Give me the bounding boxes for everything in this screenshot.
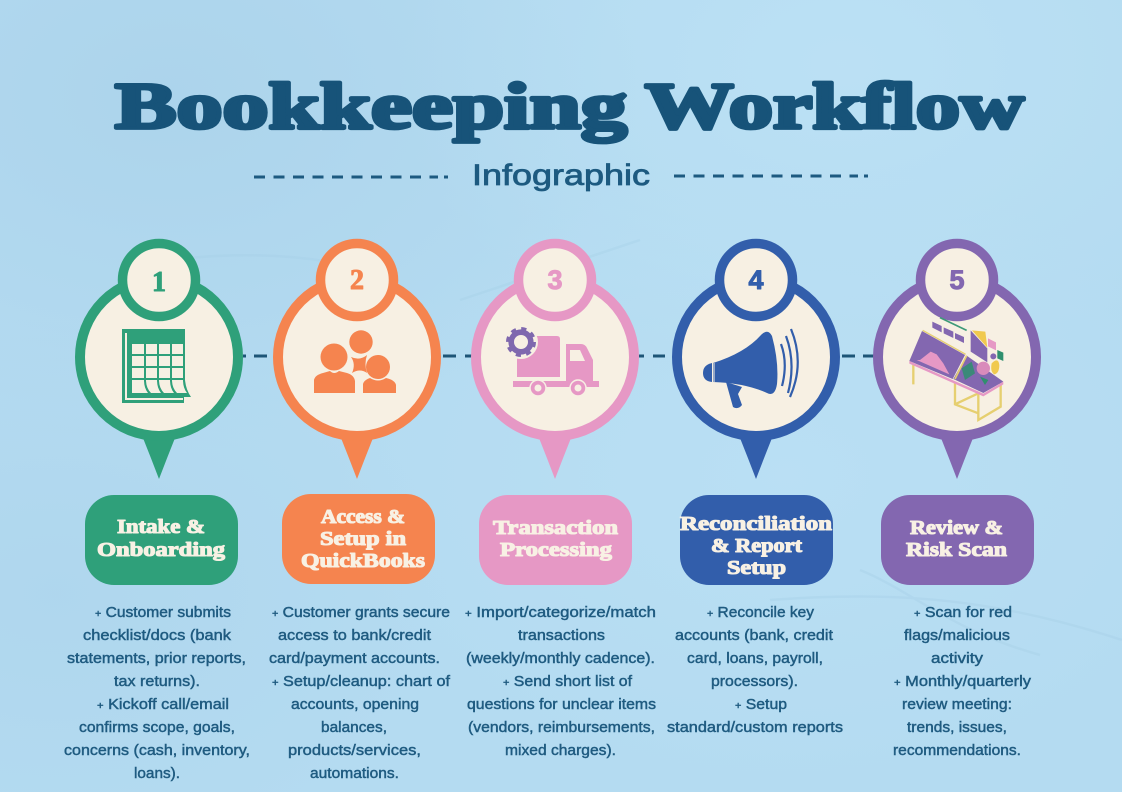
text block: step 5 details — [893, 605, 1032, 759]
pin 2: orange — [278, 244, 436, 479]
text block: step 5 details: + Monthly/quarterly — [894, 674, 1032, 690]
text block: step 5 details: recommendations. — [893, 743, 1021, 759]
panel: step 2 label: Setup in — [320, 528, 406, 550]
text block: step 1 details: + Kickoff call/email — [97, 697, 229, 713]
text block: step 1 details: confirms scope, goals, — [79, 720, 235, 736]
text block: step 3 details: transactions — [518, 628, 605, 644]
icon: isometric desk — [909, 318, 1003, 420]
text block: step 5 details: review meeting: — [902, 697, 1012, 713]
text block: step 4 details: + Reconcile key — [707, 605, 815, 621]
text block: step 1 details: statements, prior reports, — [67, 651, 246, 667]
pin 4: blue — [677, 244, 835, 479]
icon: delivery truck with gear — [504, 325, 599, 396]
text block: step 2 details: access to bank/credit — [278, 628, 431, 644]
text block: step 2 details: products/services, — [288, 743, 421, 759]
text block: step 4 details: processors). — [711, 674, 798, 690]
text block: step 5 details: activity — [931, 651, 984, 667]
text block: step 2 details: accounts, opening — [291, 697, 419, 713]
panel: step 2 label: QuickBooks — [301, 550, 425, 572]
text block: step 3 details: (vendors, reimbursements, — [468, 720, 655, 736]
panel: step 4 label: Reconciliation — [680, 513, 832, 535]
pin 1: green — [80, 244, 238, 479]
panel: step 4 label — [680, 495, 833, 585]
title: Workflow — [645, 70, 1024, 143]
icon: calendar — [122, 329, 191, 403]
title — [115, 70, 1024, 143]
panel: step 2 label: Access & — [321, 506, 405, 528]
panel: step 1 label: Onboarding — [97, 539, 225, 561]
text block: step 1 details: + Customer submits — [95, 605, 231, 621]
text block: step 1 details: checklist/docs (bank — [83, 628, 232, 644]
text block: step 4 details: accounts (bank, credit — [675, 628, 833, 644]
text block: step 2 details: card/payment accounts. — [269, 651, 440, 667]
panel: step 5 label — [881, 495, 1034, 585]
text block: step 5 details: trends, issues, — [907, 720, 1007, 736]
panel: step 1 label: Intake & — [117, 516, 205, 538]
pin 5: purple — [878, 244, 1036, 479]
icon: group of people — [314, 330, 396, 393]
text block: step 1 details — [64, 605, 250, 782]
text block: step 5 details: flags/malicious — [904, 628, 1010, 644]
dashed connector between pins — [243, 354, 875, 358]
text block: step 3 details: + Import/categorize/match — [465, 605, 656, 621]
panel: step 2 label — [282, 494, 435, 584]
panel: step 3 label — [479, 495, 632, 585]
number 5: 5 — [949, 265, 965, 295]
text block: step 4 details: standard/custom reports — [667, 720, 843, 736]
text block: step 1 details: concerns (cash, inventory, — [64, 743, 250, 759]
panel: step 1 label — [85, 495, 238, 585]
text block: step 2 details: automations. — [310, 766, 399, 782]
panel: step 4 label: Setup — [727, 557, 786, 579]
icon: megaphone — [703, 329, 798, 408]
number 3: 3 — [547, 265, 563, 295]
text block: step 3 details: mixed charges). — [505, 743, 616, 759]
panel: step 3 label: Processing — [500, 539, 612, 561]
text block: step 5 details: + Scan for red — [914, 605, 1012, 621]
text block: step 2 details: + Customer grants secure — [272, 605, 450, 621]
subtitle with dashed rules: Infographic — [472, 159, 650, 192]
text block: step 4 details — [667, 605, 843, 736]
text block: step 3 details: questions for unclear items — [467, 697, 656, 713]
panel: step 3 label: Transaction — [493, 517, 618, 539]
text block: step 3 details: + Send short list of — [503, 674, 633, 690]
pin 3: pink — [476, 244, 634, 479]
number 2: 2 — [350, 265, 364, 296]
number 4: 4 — [748, 265, 764, 295]
text block: step 4 details: + Setup — [735, 697, 787, 713]
text block: step 1 details: tax returns). — [114, 674, 200, 690]
panel: step 4 label: & Report — [711, 535, 802, 557]
number 1: 1 — [152, 267, 166, 298]
panel: step 5 label: Review & — [910, 517, 1003, 539]
text block: step 4 details: card, loans, payroll, — [687, 651, 823, 667]
panel: step 5 label: Risk Scan — [906, 539, 1007, 561]
text block: step 3 details: (weekly/monthly cadence). — [466, 651, 655, 667]
text block: step 2 details — [269, 605, 451, 782]
text block: step 2 details: balances, — [321, 720, 387, 736]
text block: step 1 details: loans). — [134, 766, 180, 782]
text block: step 2 details: + Setup/cleanup: chart of — [272, 674, 451, 690]
text block: step 3 details — [465, 605, 656, 759]
title: Bookkeeping — [115, 70, 627, 143]
